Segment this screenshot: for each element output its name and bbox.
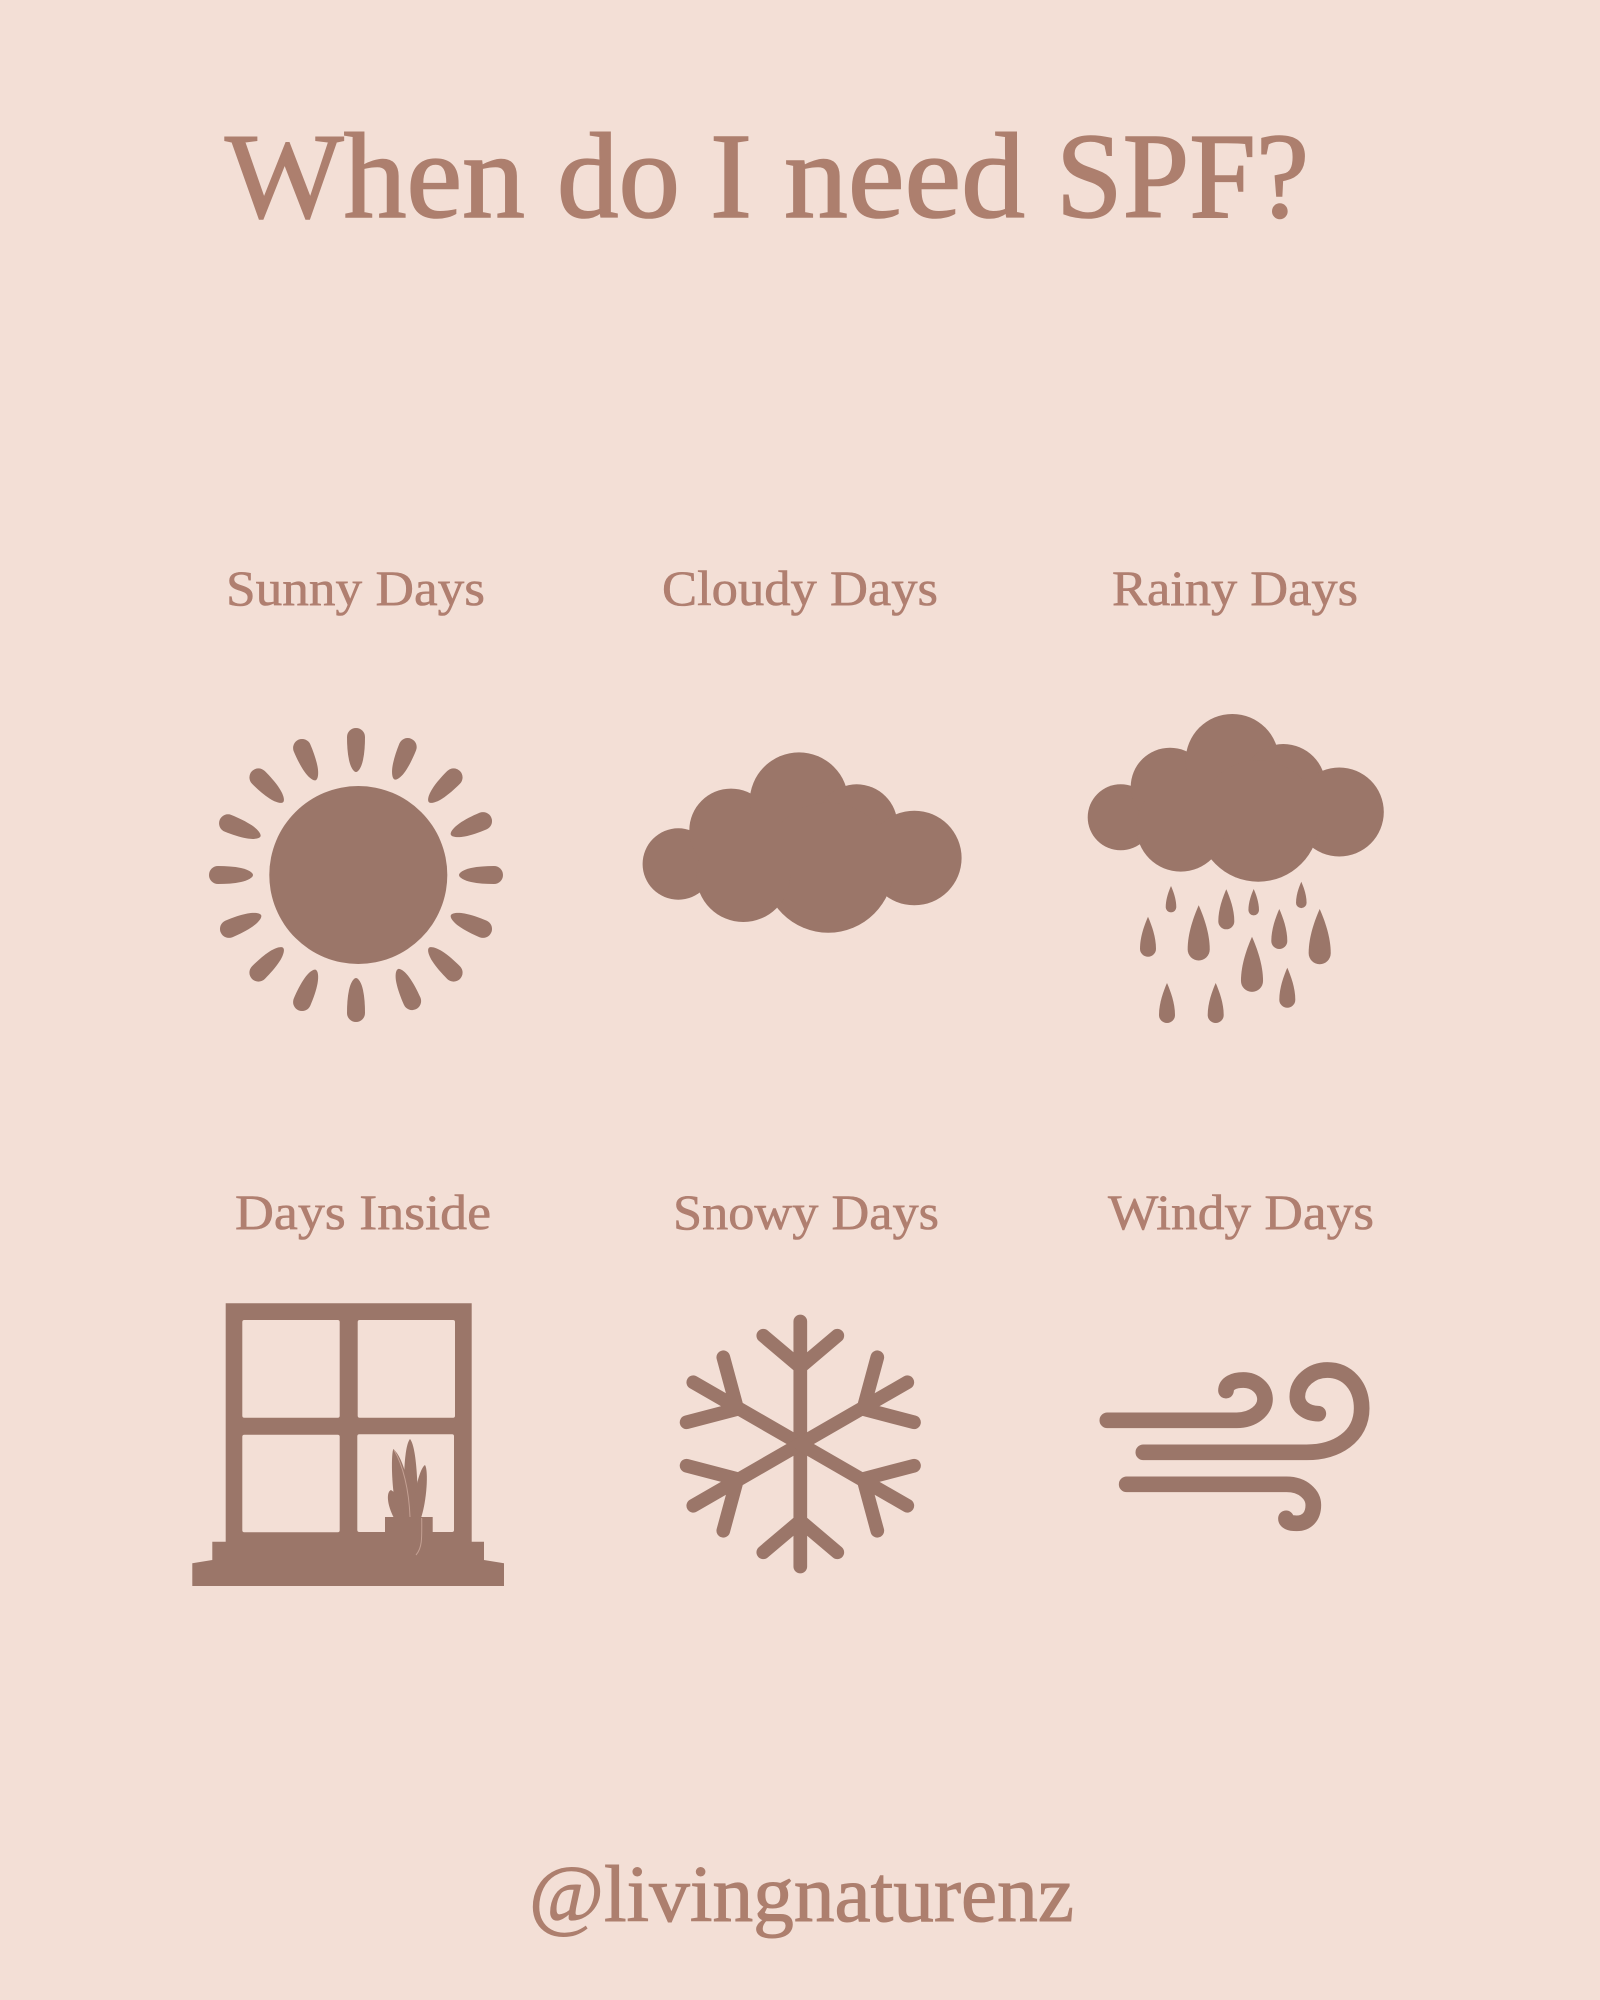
label: days inside: Days Inside xyxy=(235,1184,491,1240)
title: do xyxy=(557,109,680,244)
panel: cloudy days xyxy=(643,560,962,933)
panel: days inside xyxy=(192,1184,504,1586)
icon: rain cloud xyxy=(1088,714,1384,1023)
label: snowy days: Snowy Days xyxy=(673,1184,939,1240)
label: cloudy days: Cloudy Days xyxy=(662,560,938,616)
panel: rainy days xyxy=(1088,560,1384,1023)
icon: wind xyxy=(1107,1370,1362,1523)
title: I xyxy=(710,109,752,244)
panel: windy days xyxy=(1107,1184,1374,1523)
icon: sun xyxy=(209,728,503,1022)
label: sunny days: Sunny Days xyxy=(226,560,485,616)
icon: snowflake xyxy=(687,1322,914,1566)
title xyxy=(225,109,1309,244)
title: need xyxy=(784,109,1025,244)
panel: sunny days xyxy=(209,560,503,1022)
title: When xyxy=(225,109,525,244)
icon: window with plant xyxy=(192,1303,504,1586)
icon: cloud xyxy=(643,752,962,933)
label: windy days: Windy Days xyxy=(1108,1184,1374,1240)
title: SPF? xyxy=(1056,109,1309,244)
panel: snowy days xyxy=(673,1184,939,1566)
handle: @livingnaturenz xyxy=(529,1851,1074,1939)
label: rainy days: Rainy Days xyxy=(1112,560,1358,616)
